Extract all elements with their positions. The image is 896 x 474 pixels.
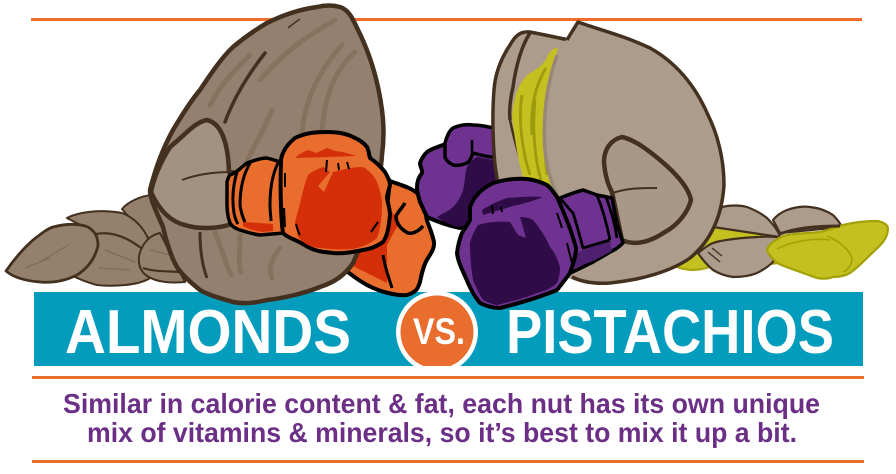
green kernel — [512, 48, 558, 190]
almond grooves — [210, 20, 355, 278]
tagline line 2: mix of vitamins & minerals, so it’s best to mix it up a bit. — [87, 417, 797, 448]
purple rear glove — [417, 125, 497, 228]
almond arm — [151, 120, 238, 228]
tagline line 1: Similar in calorie content & fat, each nut has its own unique — [63, 388, 820, 419]
large almond shell — [150, 6, 384, 303]
small pistachios and kernels — [677, 206, 888, 279]
small almonds pile — [6, 195, 185, 286]
purple front glove — [457, 179, 623, 308]
front half of shell — [543, 22, 724, 284]
pistachio arm — [604, 137, 691, 243]
heading: pistachios: PISTACHIOS — [506, 298, 834, 367]
orange rear glove — [343, 181, 434, 295]
orange front glove — [227, 132, 390, 253]
vs badge — [396, 291, 478, 373]
pistachio with boxing glove — [457, 22, 888, 308]
back half of shell — [493, 32, 569, 190]
heading: almonds: ALMONDS — [65, 298, 351, 367]
banner — [34, 292, 863, 367]
tagline — [63, 388, 820, 448]
almond with boxing glove — [150, 6, 434, 303]
vs badge: VS. — [413, 311, 465, 352]
